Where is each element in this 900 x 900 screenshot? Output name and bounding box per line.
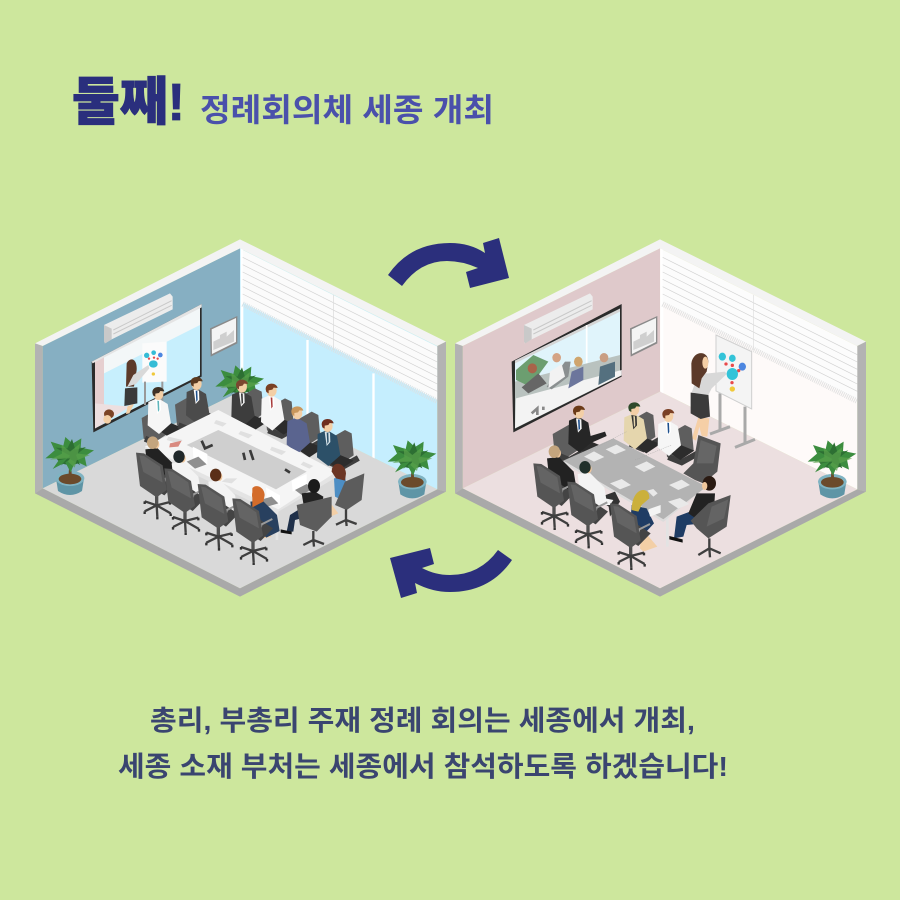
- wall picture: [630, 316, 657, 357]
- front row participants: [533, 445, 731, 570]
- wall end posts: [35, 342, 446, 493]
- video screen with remote participants: [512, 304, 622, 432]
- floor edge: [455, 488, 866, 597]
- arrow: clockwise top: [388, 238, 509, 288]
- video screen with presenter: [92, 304, 202, 432]
- floor edge: [35, 488, 446, 597]
- U-shaped conference table: [145, 410, 338, 540]
- panel: room with video conference: [35, 239, 446, 597]
- left wall: [43, 248, 240, 488]
- plant left: [45, 437, 94, 495]
- caption text: [118, 705, 728, 782]
- arrow: clockwise bottom: [390, 548, 512, 598]
- wall end posts: [455, 342, 866, 493]
- conference table: [563, 432, 707, 547]
- presenter: [691, 353, 727, 441]
- subtitle: 정례회의체 세종 개최: [200, 92, 494, 128]
- title: 둘째!: 둘째!: [72, 74, 185, 132]
- laptops: [187, 447, 313, 507]
- wall top band: [455, 239, 866, 346]
- caption line 2: 세종 소재 부처는 세종에서 참석하도록 하겠습니다!: [118, 751, 728, 782]
- left wall: [463, 248, 660, 488]
- panel: room with meeting in person: [455, 239, 866, 597]
- wall picture: [210, 316, 237, 357]
- air conditioner: [104, 293, 173, 343]
- empty chair: [683, 435, 721, 483]
- caption line 1: 총리, 부총리 주재 정례 회의는 세종에서 개최,: [150, 705, 695, 736]
- back row participants: [142, 377, 358, 470]
- paper sheets: [584, 445, 690, 509]
- plant right: [388, 440, 436, 498]
- flipchart with idea diagram: [710, 335, 755, 447]
- floor: [463, 392, 857, 588]
- plant right: [808, 440, 856, 498]
- air conditioner: [524, 293, 593, 343]
- plant back corner: [215, 365, 264, 401]
- window wall: [240, 248, 437, 489]
- wall top band: [35, 239, 446, 346]
- front row participants: [136, 436, 364, 565]
- back row participants: [553, 402, 698, 462]
- window wall: [660, 248, 857, 489]
- floor: [43, 392, 437, 588]
